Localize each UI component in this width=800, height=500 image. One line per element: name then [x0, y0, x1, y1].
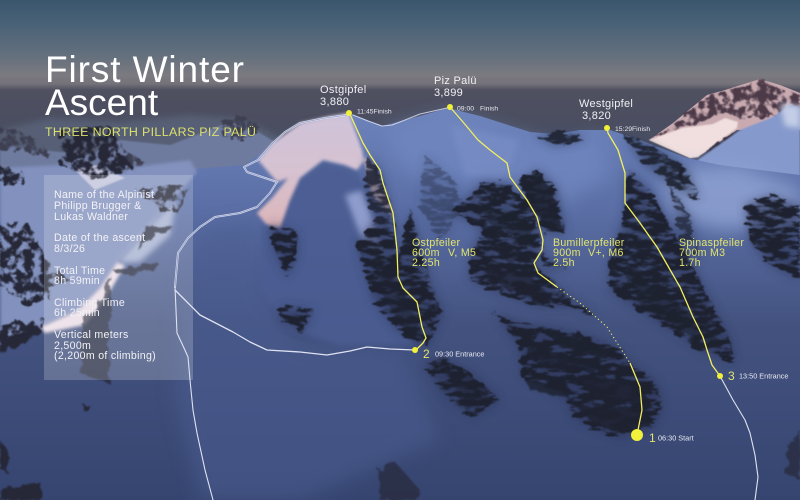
- summit label: Piz Palü: Piz Palü: [434, 75, 477, 87]
- finish times: 11:45Finish: [357, 108, 392, 116]
- stats text: 6h 25min: [54, 307, 100, 319]
- waypoint 2 label: 09:30 Entrance: [435, 350, 484, 358]
- stats text: Total Time: [54, 265, 105, 277]
- summit label: Ostgipfel: Ostgipfel: [320, 84, 367, 96]
- stats text: Vertical meters: [54, 329, 129, 341]
- summit label: Westgipfel: 3,820: [582, 110, 611, 122]
- waypoint 3 label: 13:50 Entrance: [739, 372, 788, 380]
- route label: Spinaspfeiler: [679, 237, 744, 269]
- route label: Bumillerpfeiler: Bumillerpfeiler: [553, 237, 625, 249]
- yellow route 1: Bumillerpfeiler: [450, 107, 642, 435]
- distant left mountains: [0, 115, 300, 260]
- white approach and ridge lines: [175, 108, 758, 500]
- stats panel: [44, 175, 193, 380]
- route label: Ostpfeiler: V, M5: [448, 247, 476, 259]
- finish times: 15:29Finish: [615, 126, 650, 133]
- soft shadow around rock masses: [270, 133, 800, 438]
- route label: Spinaspfeiler: Spinaspfeiler: [679, 237, 744, 249]
- route label: Ostpfeiler: [412, 237, 476, 269]
- finish times: 09:00: [457, 106, 474, 112]
- waypoint dots: [346, 104, 723, 441]
- stats text: [54, 189, 156, 362]
- finish times: Finish: [480, 106, 498, 112]
- route label: Bumillerpfeiler: V+, M6: [588, 247, 624, 259]
- route label: Spinaspfeiler: 1.7h: [679, 257, 701, 269]
- distant right peak: [649, 79, 800, 215]
- lit snow face of Ostgipfel: [257, 113, 393, 228]
- route label: Bumillerpfeiler: 900m: [553, 247, 581, 259]
- main massif snow: [0, 108, 800, 500]
- route label: Ostpfeiler: Ostpfeiler: [412, 237, 461, 249]
- title: Ascent: [45, 82, 159, 123]
- summit label: Piz Palü: 3,899: [434, 87, 463, 99]
- finish times: [357, 106, 650, 133]
- waypoint 2 label: [423, 347, 484, 361]
- title: First Winter: [45, 49, 244, 90]
- waypoint 3 label: [728, 369, 788, 383]
- stats text: Name of the Alpinist: [54, 189, 154, 201]
- stats text: 8h 59min: [54, 275, 100, 287]
- route label: Bumillerpfeiler: [553, 237, 625, 269]
- route label: Bumillerpfeiler: 2.5h: [553, 257, 575, 269]
- soft lit snow zones: [175, 115, 800, 500]
- summit label: Ostgipfel: [320, 84, 367, 108]
- route label: Ostpfeiler: 600m: [412, 247, 440, 259]
- left lit snow slopes: [0, 160, 197, 345]
- lit rib on shaded face: [345, 190, 385, 262]
- route label: Spinaspfeiler: 700m M3: [679, 247, 725, 259]
- stats text: Philipp Brugger &: [54, 200, 142, 212]
- yellow route 2: Ostpfeiler: [349, 112, 426, 350]
- waypoint 2 label: 2: [423, 347, 430, 361]
- stats text: 8/3/26: [54, 243, 85, 255]
- summit label: Ostgipfel: 3,880: [320, 96, 349, 108]
- waypoint 3 label: 3: [728, 369, 735, 383]
- subtitle: THREE NORTH PILLARS PIZ PALÜ: [45, 125, 256, 139]
- stats text: Date of the ascent: [54, 232, 145, 244]
- stats text: Climbing Time: [54, 297, 125, 309]
- shaded face under Ostgipfel: [258, 160, 415, 345]
- stats text: 2,500m: [54, 340, 91, 352]
- route label: Ostpfeiler: 2.25h: [412, 257, 440, 269]
- waypoint 1 label: 06:30 Start: [658, 434, 694, 442]
- stats text: Lukas Waldner: [54, 211, 128, 223]
- summit label: Westgipfel: Westgipfel: [579, 98, 633, 110]
- main massif rock bands: [270, 133, 800, 438]
- stats text: (2,200m of climbing): [54, 350, 156, 362]
- left dark rock outcrops: [0, 125, 800, 500]
- waypoint 1 label: [649, 431, 694, 445]
- yellow route 3: Spinaspfeiler: [607, 128, 720, 376]
- summit label: Westgipfel: [579, 98, 633, 122]
- waypoint 1 label: 1: [649, 431, 656, 445]
- summit label: Piz Palü: [434, 75, 477, 99]
- sky and haze background: [0, 0, 800, 180]
- title: [45, 49, 244, 123]
